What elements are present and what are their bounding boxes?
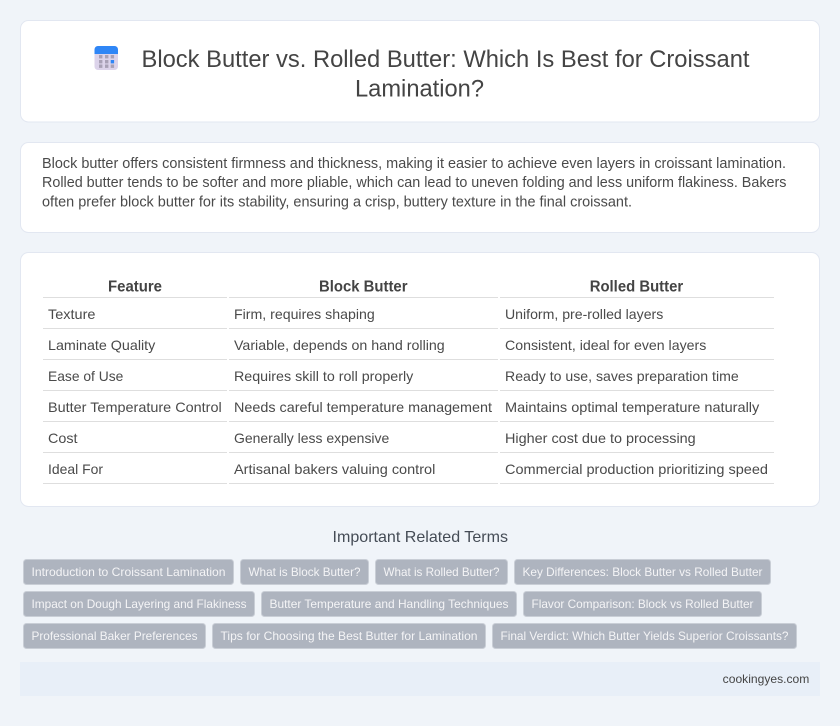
panel: intro paragraph bbox=[20, 142, 820, 232]
tag bbox=[24, 560, 234, 584]
row: Ideal For: Ideal For bbox=[48, 461, 103, 477]
row: Butter Temperature Control: Maintains optimal temperature naturally bbox=[505, 399, 759, 415]
tag: Impact on Dough Layering and Flakiness bbox=[32, 597, 246, 611]
tag bbox=[24, 592, 254, 616]
title: Block Butter vs. Rolled Butter: Which Is Best for Croissant bbox=[142, 46, 750, 73]
row: Cost bbox=[43, 430, 774, 453]
row: Ideal For: Commercial production prioritizing speed bbox=[505, 461, 768, 477]
row: Butter Temperature Control: Needs careful temperature management bbox=[234, 399, 492, 415]
row: Ease of Use: Ease of Use bbox=[48, 368, 124, 384]
panel: intro paragraph: Block butter offers consistent firmness and thickness, making it easier to achieve even layers in croissant lamination. bbox=[42, 156, 786, 172]
tag bbox=[524, 592, 762, 616]
row: Ideal For: Artisanal bakers valuing control bbox=[234, 461, 435, 477]
table header row: Block Butter bbox=[319, 278, 408, 296]
tag bbox=[376, 560, 508, 584]
tag: Flavor Comparison: Block vs Rolled Butter bbox=[532, 597, 754, 611]
tag: Butter Temperature and Handling Techniques bbox=[270, 597, 508, 611]
panel: intro paragraph: often prefer block butter for its stability, ensuring a crisp, buttery texture in the final croissant. bbox=[42, 194, 632, 210]
title bbox=[142, 46, 750, 102]
row: Texture: Texture bbox=[48, 306, 96, 322]
panel: comparison table bbox=[20, 252, 820, 506]
tag bbox=[240, 560, 368, 584]
row: Ease of Use: Requires skill to roll properly bbox=[234, 368, 413, 384]
tag: Tips for Choosing the Best Butter for Lamination bbox=[220, 629, 478, 643]
tag: Professional Baker Preferences bbox=[32, 629, 198, 643]
row: Butter Temperature Control: Butter Temperature Control bbox=[48, 399, 222, 415]
title: Lamination? bbox=[355, 76, 484, 102]
row: Ease of Use: Ready to use, saves preparation time bbox=[505, 368, 739, 384]
tag: What is Block Butter? bbox=[248, 565, 361, 579]
tag bbox=[24, 624, 206, 648]
footer: cookingyes.com bbox=[723, 672, 809, 686]
row: Cost: Generally less expensive bbox=[234, 430, 390, 446]
row: Laminate Quality bbox=[43, 337, 774, 360]
footer bbox=[20, 662, 820, 696]
tag bbox=[262, 592, 516, 616]
tag: Key Differences: Block Butter vs Rolled Butter bbox=[522, 565, 762, 579]
tag: Introduction to Croissant Lamination bbox=[32, 565, 226, 579]
row: Texture bbox=[43, 306, 774, 329]
row: Ideal For bbox=[43, 461, 774, 484]
tag: What is Rolled Butter? bbox=[384, 565, 500, 579]
tag: Final Verdict: Which Butter Yields Superior Croissants? bbox=[500, 629, 789, 643]
header panel bbox=[20, 20, 820, 122]
row: Butter Temperature Control bbox=[43, 399, 774, 422]
panel: intro paragraph: Rolled butter tends to be softer and more pliable, which can lead to uneven folding and less uniform flakiness. Bakers bbox=[42, 175, 786, 191]
heading: related terms: Important Related Terms bbox=[332, 529, 508, 546]
row: Laminate Quality: Consistent, ideal for even layers bbox=[505, 337, 706, 353]
related term tags bbox=[24, 560, 796, 648]
table header row: Rolled Butter bbox=[590, 278, 683, 296]
row: Ease of Use bbox=[43, 368, 774, 391]
icon: calendar bbox=[94, 46, 118, 70]
row: Laminate Quality: Variable, depends on hand rolling bbox=[234, 337, 445, 353]
row: Laminate Quality: Laminate Quality bbox=[48, 337, 155, 353]
table header row: Feature bbox=[108, 278, 162, 296]
tag bbox=[492, 624, 796, 648]
tag bbox=[514, 560, 770, 584]
tag bbox=[212, 624, 486, 648]
row: Cost: Cost bbox=[48, 430, 78, 446]
table header row bbox=[43, 278, 774, 298]
row: Texture: Uniform, pre-rolled layers bbox=[505, 306, 663, 322]
row: Cost: Higher cost due to processing bbox=[505, 430, 696, 446]
row: Texture: Firm, requires shaping bbox=[234, 306, 375, 322]
